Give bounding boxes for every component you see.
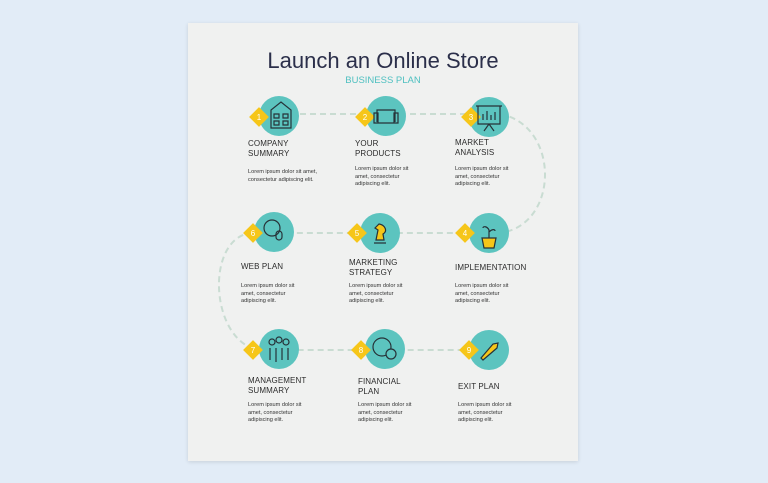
text: amet, consectetur	[241, 290, 285, 296]
step 6	[241, 262, 294, 304]
dashed path	[219, 114, 545, 350]
text: IMPLEMENTATION	[455, 263, 526, 272]
number diamonds	[243, 107, 481, 360]
text: adipiscing elit.	[349, 298, 384, 304]
text: SUMMARY	[248, 148, 289, 158]
text: amet, consectetur	[455, 290, 499, 296]
text: Lorem ipsum dolor sit	[455, 283, 508, 289]
numbers: 3	[469, 113, 474, 122]
text: Lorem ipsum dolor sit	[241, 283, 294, 289]
numbers: 9	[467, 346, 472, 355]
numbers: 6	[251, 229, 256, 238]
text: MARKETING	[349, 258, 397, 267]
text: WEB PLAN	[241, 262, 283, 271]
text: PLAN	[358, 386, 379, 396]
numbers: 4	[463, 229, 468, 238]
text: adipiscing elit.	[248, 417, 283, 423]
text: Lorem ipsum dolor sit	[458, 402, 511, 408]
text: Lorem ipsum dolor sit	[248, 402, 301, 408]
text: ANALYSIS	[455, 148, 494, 156]
icons	[264, 102, 502, 362]
numbers: 2	[363, 113, 368, 122]
text: YOUR	[355, 139, 379, 148]
subtitle: BUSINESS PLAN	[345, 75, 421, 86]
text: PRODUCTS	[355, 148, 401, 158]
text: Lorem ipsum dolor sit	[355, 166, 408, 172]
text: amet, consectetur	[458, 410, 502, 416]
step 3	[455, 138, 508, 187]
step 8	[358, 377, 412, 423]
text: adipiscing elit.	[455, 181, 490, 187]
step 7	[248, 376, 306, 423]
text: consectetur adipiscing elit.	[248, 176, 314, 182]
numbers: 1	[257, 113, 262, 122]
text: STRATEGY	[349, 268, 392, 276]
numbers: 5	[355, 229, 360, 238]
text: adipiscing elit.	[358, 417, 393, 423]
text: amet, consectetur	[455, 174, 499, 180]
card panel	[188, 23, 578, 461]
text: MARKET	[455, 138, 489, 147]
step 9	[458, 382, 512, 423]
text: Lorem ipsum dolor sit amet,	[248, 169, 317, 175]
text: Lorem ipsum dolor sit	[358, 402, 411, 408]
text: MANAGEMENT	[248, 376, 306, 385]
step 4	[455, 263, 526, 304]
numbers	[251, 113, 474, 355]
numbers: 8	[359, 346, 364, 355]
step 5	[349, 258, 402, 304]
text: adipiscing elit.	[455, 298, 490, 304]
text: amet, consectetur	[349, 290, 393, 296]
numbers: 7	[251, 346, 256, 355]
title: Launch an Online Store	[267, 48, 499, 73]
step circles	[254, 96, 509, 370]
text: FINANCIAL	[358, 377, 401, 386]
text: adipiscing elit.	[355, 181, 390, 187]
text: amet, consectetur	[358, 410, 402, 416]
text: amet, consectetur	[355, 174, 399, 180]
text: adipiscing elit.	[241, 298, 276, 304]
text: Lorem ipsum dolor sit	[455, 166, 508, 172]
step 1	[248, 139, 317, 182]
text: COMPANY	[248, 139, 289, 148]
text: Lorem ipsum dolor sit	[349, 283, 402, 289]
text: amet, consectetur	[248, 410, 292, 416]
step 2	[355, 139, 408, 187]
text: EXIT PLAN	[458, 382, 500, 391]
text: SUMMARY	[248, 386, 289, 394]
text: adipiscing elit.	[458, 417, 493, 423]
